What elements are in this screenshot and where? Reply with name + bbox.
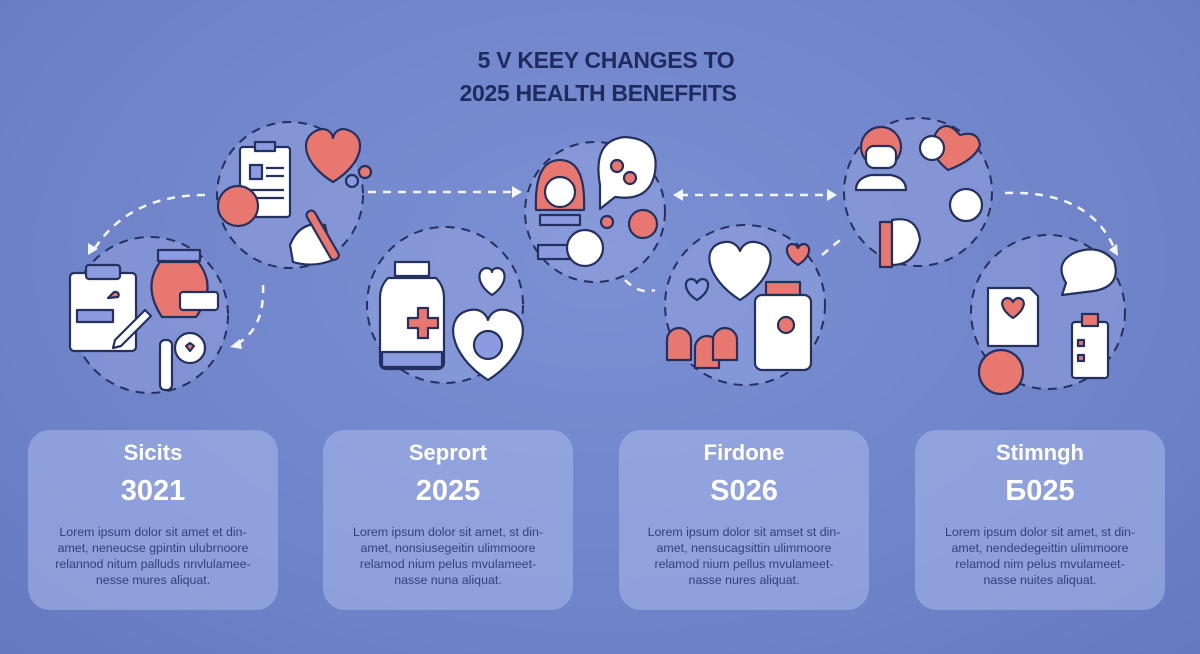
icon: clock c2 (218, 186, 258, 226)
card 3 (619, 430, 869, 610)
card 4: relamod nim pelus mvulameet- (955, 557, 1125, 571)
icon: woman c4 (536, 160, 584, 225)
icon: speech bubble c4 (598, 137, 656, 209)
card 4: amet, nendedegeittin ulimmoore (951, 541, 1128, 555)
icon: megaphone c2 (290, 209, 340, 265)
circle 3 (367, 227, 523, 383)
icon: bottle c3 (380, 262, 444, 369)
card 4: nasse nuites aliquat. (984, 573, 1096, 587)
card 1: relannod nitum palluds nnvlulamee- (55, 557, 251, 571)
icon: doctor c6 (856, 127, 906, 190)
card 2: 2025 (416, 475, 480, 507)
circle 6 (844, 118, 992, 266)
card 2: Lorem ipsum dolor sit amet, st din- (353, 525, 543, 539)
circle 2 (217, 122, 363, 268)
card 1: amet, neneucse gpintin ulubrnoore (58, 541, 248, 555)
card 1: 3021 (121, 475, 185, 507)
icon: heart shield c3 (453, 310, 523, 380)
arrow: c4 to c6 (680, 194, 830, 196)
icon: tools c1 (160, 333, 205, 390)
card 1 (28, 430, 278, 610)
card 1: nesse mures aliquat. (96, 573, 210, 587)
icon: chat c4 (538, 216, 613, 266)
icon: speech c7 (1062, 249, 1116, 295)
icon: small heart c3 (479, 268, 505, 295)
icon: clipboard c1 (70, 265, 151, 351)
card 4 (915, 430, 1165, 610)
icon: calculator c4 (629, 210, 657, 238)
card 1: Sicits (124, 440, 182, 465)
icon: download c6 (950, 189, 982, 221)
icon: people c5 (667, 328, 737, 368)
card 3: amet, nensucagsittin ulimmoore (657, 541, 831, 555)
arrow: c4 to c5 (625, 280, 655, 291)
arrow: c6 to c7 (1005, 193, 1115, 250)
title (460, 47, 736, 106)
icon: jar c1 (151, 250, 218, 317)
card 4: Б025 (1005, 475, 1075, 507)
icon: heart c6 (932, 126, 980, 170)
title: 2025 HEALTH BENEFFITS (460, 80, 736, 106)
card 2: relamod nium pelus mvulameet- (360, 557, 536, 571)
arrow: c2 to c1 (95, 195, 205, 248)
card 2: amet, nonsiusegeitin ulimmoore (361, 541, 535, 555)
card 2 (323, 430, 573, 610)
card 3: Lorem ipsum dolor sit amset st din- (648, 525, 840, 539)
title: 5 V KEEY CHANGES TO (478, 47, 734, 73)
icon: checklist c7 (1072, 314, 1108, 378)
card 3: relamod nium pellus mvulameet- (654, 557, 834, 571)
card 3: Firdone (704, 440, 784, 465)
icon: heart c2 (306, 129, 360, 182)
arrow: c2 to c4 (368, 191, 515, 193)
arrow: c5 to c6 (822, 240, 840, 255)
card 1: Lorem ipsum dolor sit amet et din- (59, 525, 247, 539)
circle 5 (665, 225, 825, 385)
card 3: S026 (710, 475, 778, 507)
icon: small hearts c5 (787, 244, 809, 265)
arrow: c1 to c1b (235, 285, 263, 345)
card 2: Seprort (409, 440, 487, 465)
card 3: nasse nures aliquat. (689, 573, 799, 587)
icon: document c7 (988, 288, 1038, 346)
circle 4 (525, 142, 665, 282)
icon: bubbles c2 (346, 166, 371, 187)
card 4: Lorem ipsum dolor sit amet, st din- (945, 525, 1135, 539)
icon: person badge c7 (979, 350, 1023, 394)
circle 1 (72, 237, 228, 393)
icon: jar c5 (755, 282, 811, 370)
circle 7 (971, 235, 1125, 389)
card 2: nasse nuna aliquat. (394, 573, 502, 587)
icon: heart c5 (709, 242, 771, 300)
icon: clipboard c2 (240, 142, 290, 217)
icon: book c6 (880, 219, 920, 267)
card 4: Stimngh (996, 440, 1084, 465)
